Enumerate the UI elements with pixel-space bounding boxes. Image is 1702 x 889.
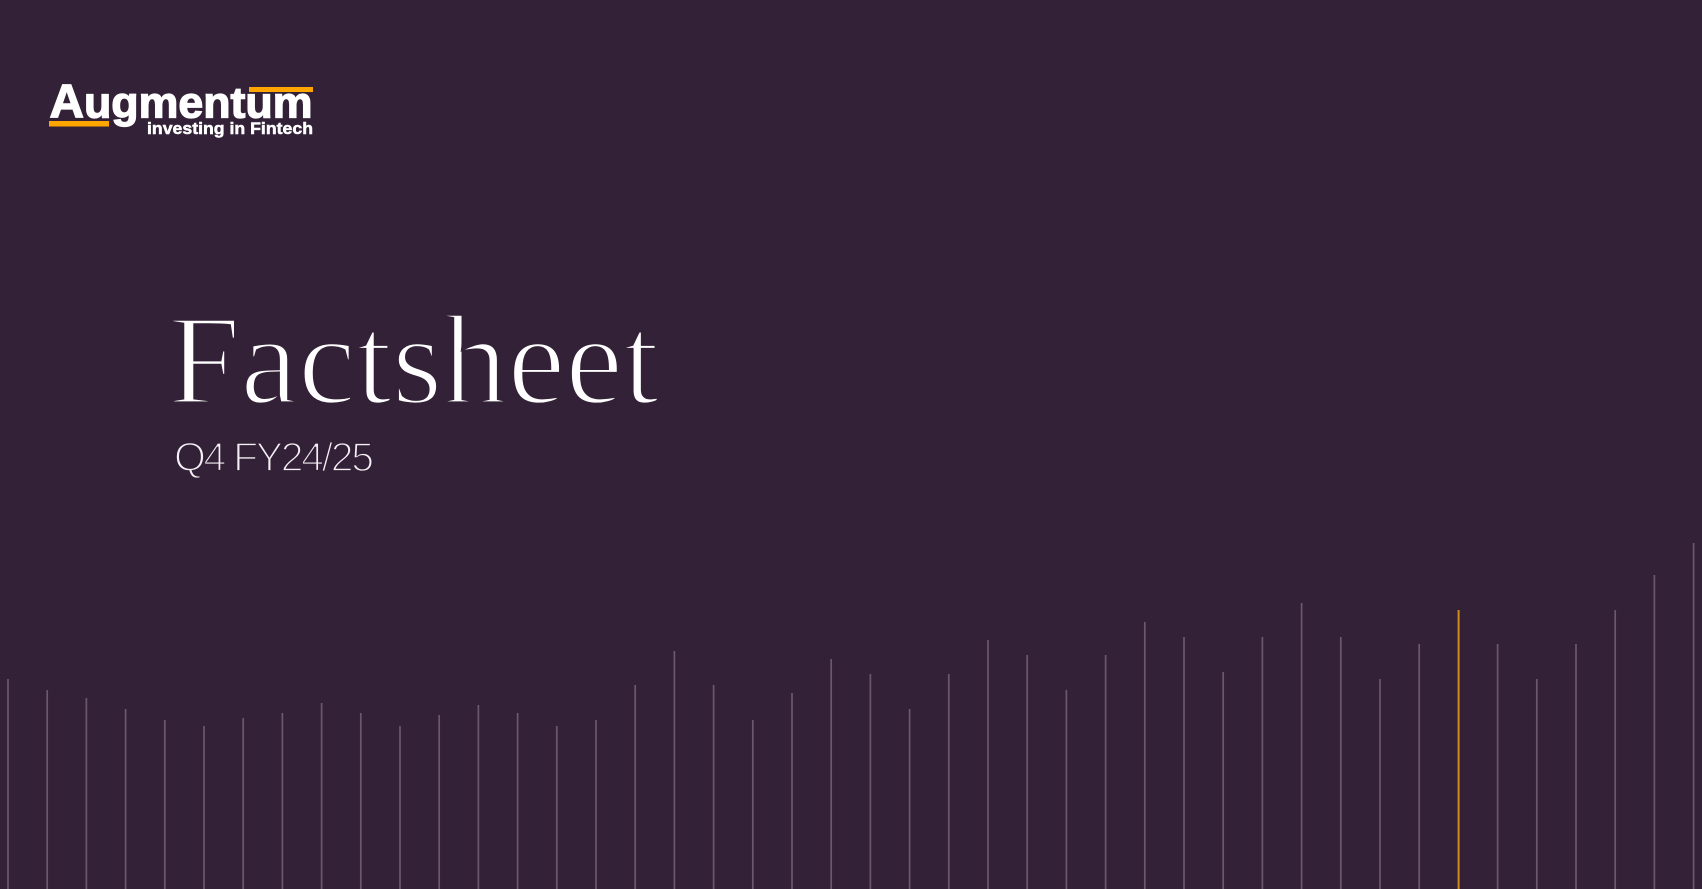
- logo tagline: investing in Fintech: [147, 120, 313, 138]
- muted bars: [8, 543, 1694, 889]
- highlighted orange bar: [1458, 610, 1460, 889]
- title: Factsheet: [168, 289, 659, 431]
- decorative bar chart: [8, 543, 1694, 889]
- logo upper orange bar: [249, 87, 313, 92]
- logo lower orange bar: [49, 121, 109, 126]
- subtitle: Q4 FY24/25: [174, 434, 374, 480]
- logo wordmark: Augmentum: [50, 74, 312, 128]
- logo: Augmentum: [49, 74, 313, 138]
